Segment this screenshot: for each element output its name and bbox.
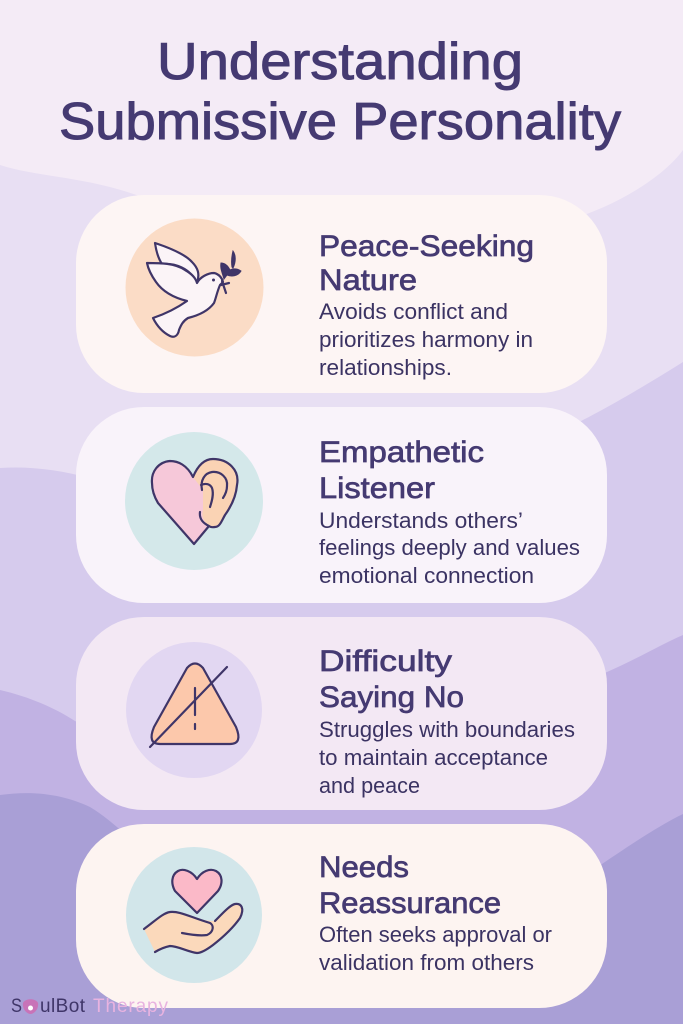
heading: difficulty saying no: Saying No xyxy=(319,681,464,714)
heading: needs reassurance: Needs xyxy=(319,851,409,884)
title xyxy=(59,33,621,151)
title: Understanding xyxy=(157,33,523,91)
heading: difficulty saying no: Difficulty xyxy=(319,645,452,678)
description: needs reassurance: validation from others xyxy=(319,950,534,975)
description: peace-seeking nature xyxy=(319,299,533,380)
description: difficulty saying no: and peace xyxy=(319,773,420,798)
panel: empathetic listener xyxy=(76,407,607,603)
description: needs reassurance xyxy=(319,922,552,975)
description: difficulty saying no: to maintain acceptance xyxy=(319,745,548,770)
heading: empathetic listener xyxy=(319,436,484,505)
icon: heart with ear xyxy=(125,432,263,570)
icon: crossed warning triangle xyxy=(126,642,262,778)
panel: needs reassurance xyxy=(76,824,607,1008)
panel: difficulty saying no xyxy=(76,617,607,810)
icon: heart in open hand xyxy=(126,847,262,983)
heading: difficulty saying no xyxy=(319,645,464,714)
heading: peace-seeking nature: Peace-Seeking xyxy=(319,230,534,263)
panel: peace-seeking nature xyxy=(76,195,607,393)
description: empathetic listener: Understands others’ xyxy=(319,508,523,533)
description: empathetic listener: emotional connection xyxy=(319,563,534,588)
description: empathetic listener xyxy=(319,508,580,588)
description: peace-seeking nature: prioritizes harmony in xyxy=(319,327,533,352)
description: empathetic listener: feelings deeply and values xyxy=(319,535,580,560)
icon: dove with olive branch xyxy=(126,218,264,356)
heading: empathetic listener: Listener xyxy=(319,472,435,505)
heading: peace-seeking nature: Nature xyxy=(319,264,417,297)
description: difficulty saying no xyxy=(319,717,575,798)
description: peace-seeking nature: Avoids conflict and xyxy=(319,299,508,324)
description: difficulty saying no: Struggles with boundaries xyxy=(319,717,575,742)
watermark: SoulBot Therapy: ulBot xyxy=(40,996,86,1017)
heading: needs reassurance xyxy=(319,851,501,920)
watermark: SoulBot Therapy xyxy=(11,996,168,1017)
heading: empathetic listener: Empathetic xyxy=(319,436,484,469)
title: Submissive Personality xyxy=(59,93,621,151)
watermark: SoulBot Therapy: Therapy xyxy=(93,996,168,1017)
watermark: SoulBot Therapy: S xyxy=(11,996,22,1017)
heading: needs reassurance: Reassurance xyxy=(319,887,501,920)
description: needs reassurance: Often seeks approval or xyxy=(319,922,552,947)
description: peace-seeking nature: relationships. xyxy=(319,355,452,380)
heading: peace-seeking nature xyxy=(319,230,534,297)
